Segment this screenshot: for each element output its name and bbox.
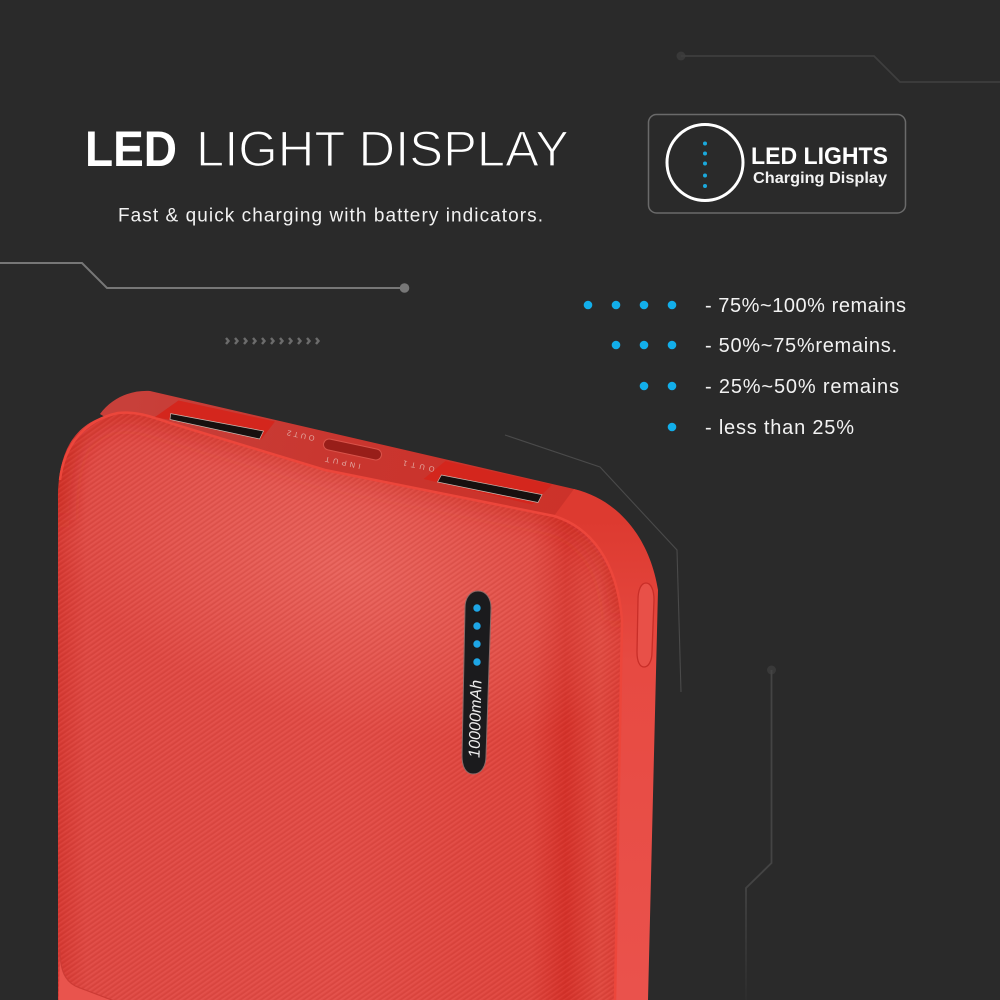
capacity label: 10000mAh [467,680,486,758]
right side surface [554,489,658,1000]
circuit line: right of power bank [505,435,681,692]
level 75-100: - 75%~100% remains [705,295,906,317]
level 50-75 [612,335,897,357]
title: LED [85,121,177,177]
icon: LED circle with dots [667,124,743,200]
USB port OUT1 [424,461,552,504]
front face [58,413,622,1000]
power button [637,583,654,667]
red power bank [50,391,658,1000]
circuit line: bottom right [746,666,776,1000]
level under 25: - less than 25% [705,417,854,439]
port label OUT1: OUT1 [402,458,435,474]
badge: LED lights charging display [648,114,906,213]
micro USB input port [323,438,382,461]
LED dots [473,604,481,666]
LED indicator panel [462,591,491,774]
face highlight and shading [50,400,630,1000]
chevron row [226,338,318,344]
bottom left seam [58,950,175,1000]
port label OUT2: OUT2 [286,428,315,443]
level 75-100 [584,295,906,317]
USB port OUT2 [155,400,275,439]
subtitle: Fast & quick charging with battery indicators. [118,206,543,226]
circuit line: left with end dot [0,263,409,293]
level 50-75: - 50%~75%remains. [705,335,897,357]
level 25-50: - 25%~50% remains [705,376,899,398]
top edge surface [100,391,650,640]
front edge lip [60,413,622,1000]
legend: battery levels [584,295,906,439]
title: LIGHT DISPLAY [196,121,569,177]
badge heading: LED LIGHTS [751,143,888,170]
badge subheading: Charging Display [753,170,887,187]
port label INPUT: INPUT [324,454,361,471]
circuit line: top right [676,52,1000,82]
